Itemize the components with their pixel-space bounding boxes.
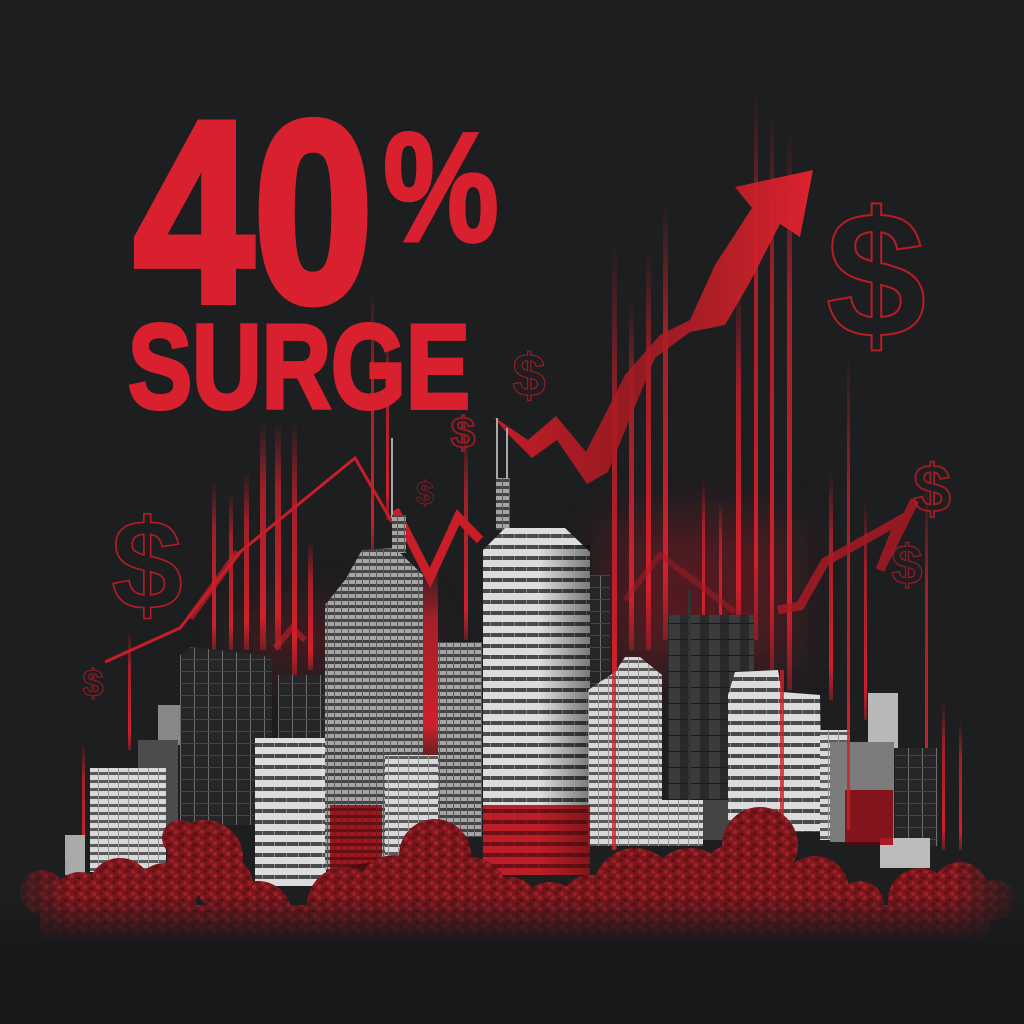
dollar sign icons: $ [416, 475, 434, 511]
dark tower left [180, 647, 272, 825]
dollar sign icons: $ [451, 409, 475, 458]
vertical red data lines [82, 90, 962, 870]
dark ground fade [0, 895, 1024, 1024]
big number: 40%: 40 [134, 67, 373, 356]
main rising arrow [494, 170, 813, 484]
right edge fade [954, 860, 1024, 950]
tall grey tower [325, 548, 423, 870]
red wash lifting tinted bases [330, 790, 893, 875]
dollar sign icons: $ [111, 494, 183, 637]
dollar sign icons: $ [913, 451, 951, 527]
heading: SURGE: SURGE [128, 300, 470, 434]
right line chart [625, 500, 915, 612]
dark glass tower [668, 615, 754, 805]
far left buildings [65, 835, 85, 875]
right white building [728, 670, 822, 832]
red tree canopy [20, 807, 1015, 949]
big number: 40%: % [383, 101, 499, 275]
dollar sign icons: $ [512, 342, 546, 409]
main white tower [483, 528, 590, 875]
city skyline [65, 418, 938, 886]
dollar sign icons: $ [826, 175, 926, 376]
dollar sign icons [82, 175, 951, 705]
left line chart arrow [105, 458, 480, 662]
left edge fade [0, 860, 70, 950]
red lines in front of buildings [612, 640, 850, 850]
red glow behind skyline [240, 520, 790, 670]
dollar sign icons: $ [891, 533, 923, 596]
antenna towers [391, 418, 510, 553]
white block [255, 738, 326, 886]
dollar sign icons: $ [82, 663, 104, 705]
red tint over tower bases [330, 790, 893, 875]
